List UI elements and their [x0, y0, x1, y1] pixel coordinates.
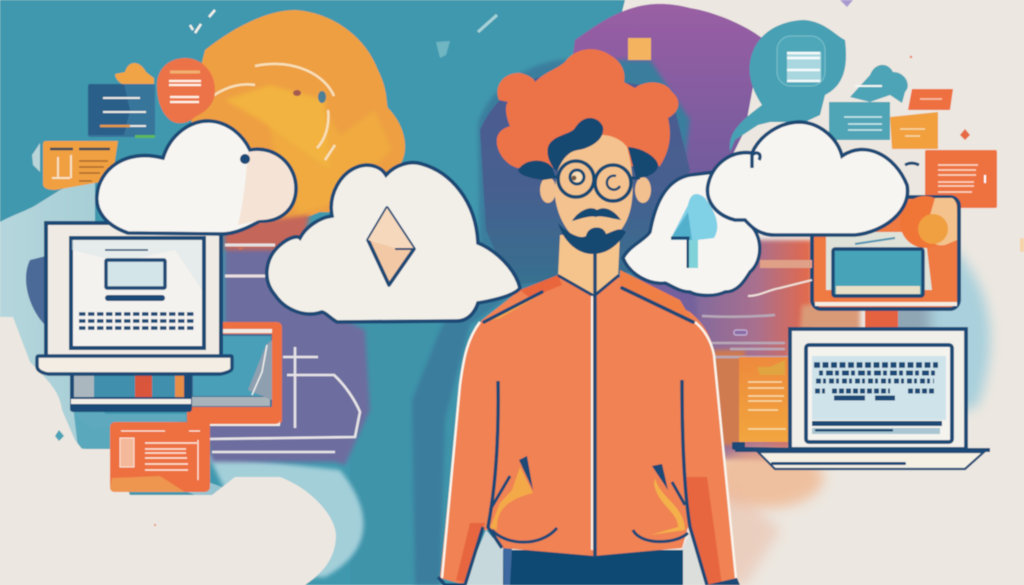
arrow icon: [671, 194, 717, 268]
white connector lines, left: [210, 347, 360, 452]
cloud: centre with diamond: [267, 163, 520, 322]
tablet screen: [833, 249, 923, 296]
cluster: top-right teal widgets: [730, 20, 997, 208]
laptop base: [732, 442, 990, 469]
orange tablet card, left: [187, 322, 282, 426]
orange document, right: [739, 357, 791, 442]
dark halo behind person: [412, 60, 690, 585]
blue code panel: [88, 84, 155, 138]
orange note bubble: [157, 58, 215, 123]
orange card, lower left: [110, 422, 210, 492]
white marks: [190, 10, 215, 33]
teal chat circle: [730, 20, 846, 152]
orange card small: [908, 89, 953, 110]
white outer edges: [442, 322, 480, 578]
cream ground, lower left: [0, 317, 336, 585]
purple diamond: [840, 0, 853, 7]
pocket, left: [490, 456, 557, 542]
purple wash, right: [560, 4, 770, 440]
yellow card: [890, 112, 938, 149]
jacket body: [440, 277, 737, 585]
face: [555, 135, 633, 250]
cloud: small with upload arrow: [623, 172, 760, 295]
right panel lines: [702, 260, 812, 357]
mustache: [572, 208, 621, 221]
orange hair cloud: [497, 49, 678, 168]
keyboard glyph block: [814, 365, 938, 398]
teal diamond: [55, 430, 64, 441]
diamond icon: [368, 208, 414, 285]
red dot: [910, 56, 912, 58]
laptop screen: [71, 238, 204, 348]
orange blob, top left: [190, 10, 405, 276]
left laptop: [37, 223, 232, 374]
glasses: [555, 161, 640, 201]
pocket, right: [633, 464, 688, 542]
cloud: far left: [97, 121, 296, 234]
keyboard rows: [79, 314, 196, 328]
trousers: [503, 550, 683, 585]
red dot: [154, 524, 156, 526]
cluster: top-left widgets: [32, 10, 215, 190]
dark hair: [518, 118, 658, 180]
cloud: right: [707, 122, 919, 235]
laptop lid: [790, 329, 966, 449]
purple wash, left of centre: [205, 225, 370, 465]
laptop base: [37, 356, 232, 374]
ears: [540, 177, 651, 203]
person: [438, 49, 740, 585]
neck: [558, 235, 620, 296]
sleeve gaps: [463, 530, 503, 585]
red diamond: [960, 129, 970, 140]
laptop lid: [46, 223, 221, 359]
right laptop: [732, 329, 990, 469]
small orange cloud: [115, 63, 154, 88]
sleeve seams: [438, 380, 707, 585]
device below left laptop: [70, 372, 192, 428]
jacket: [438, 250, 740, 585]
teal card: [829, 86, 890, 140]
small teal cloud: [850, 65, 908, 103]
window on screen: [106, 260, 165, 288]
pale marks, top centre: [436, 15, 497, 58]
orange tablet, right: [812, 196, 959, 328]
orange card large: [925, 150, 997, 208]
beard: [558, 223, 626, 254]
yellow square: [628, 38, 651, 60]
shoulder stripes and collar: [484, 250, 693, 556]
small pale star: [32, 143, 40, 172]
orange document card: [43, 141, 118, 190]
laptop screen: [806, 345, 952, 442]
orange dot, far right: [1020, 238, 1024, 252]
tablet orange blob: [900, 196, 957, 248]
